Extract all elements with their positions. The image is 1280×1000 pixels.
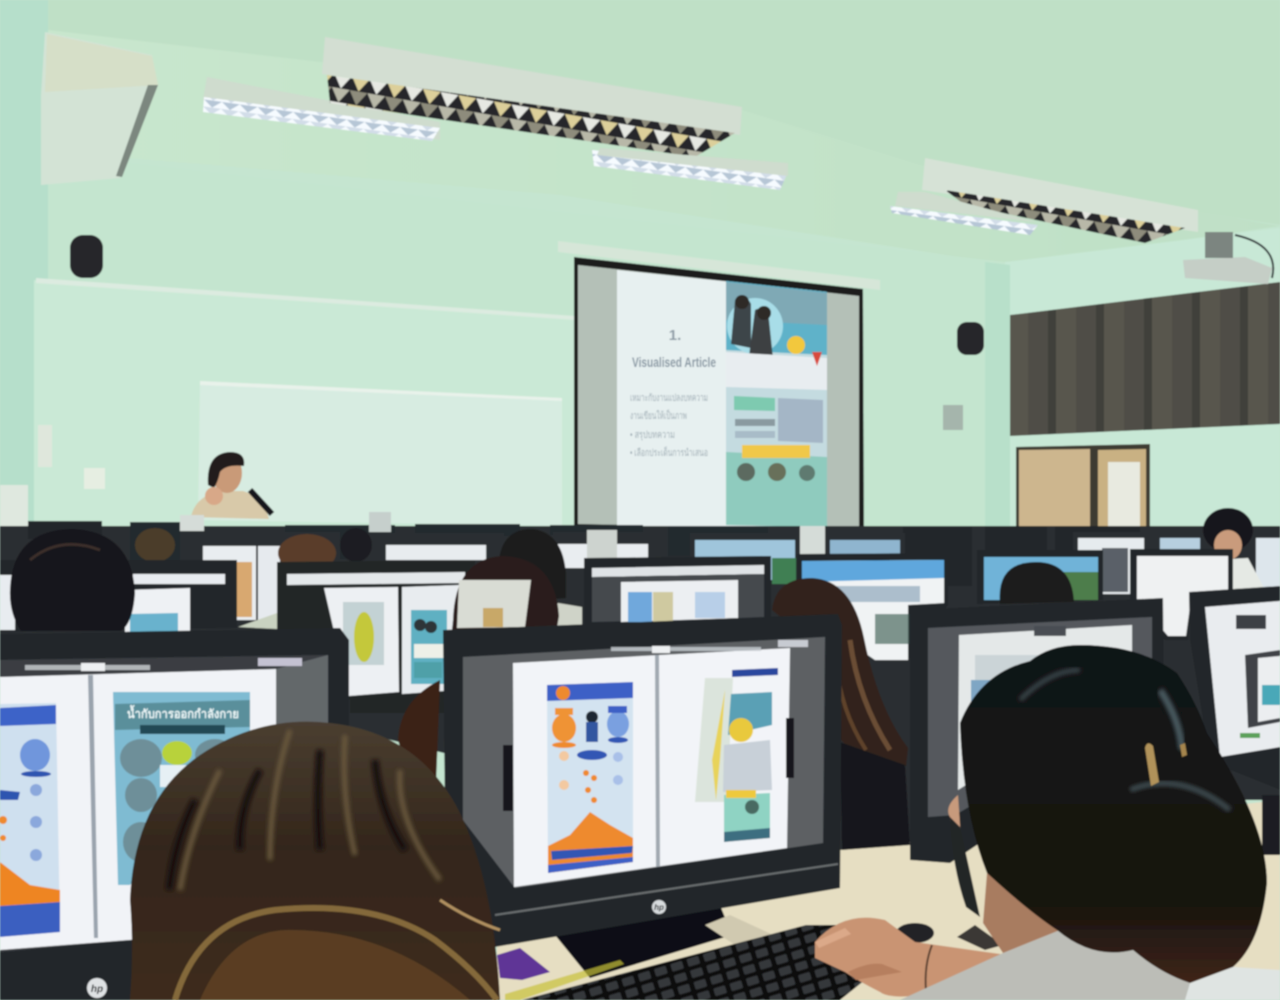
- front monitor centre: [443, 614, 842, 978]
- ceiling light fixture left: [203, 77, 440, 141]
- right student hair: [948, 645, 1267, 983]
- toolbar: [611, 640, 808, 653]
- front monitor far right: [1189, 586, 1280, 790]
- desk surface: [497, 795, 1280, 1000]
- overlapping infographic: [712, 668, 778, 842]
- slide bullet text: • สรุปบทความ: [630, 430, 675, 441]
- HP logo: hp: [91, 984, 103, 995]
- saving infographic: [547, 682, 633, 873]
- dark furniture band behind monitors: [0, 526, 1280, 865]
- electrical box and thermostat: [0, 405, 963, 555]
- front left student hair: [130, 722, 500, 1000]
- small infographic left: [0, 703, 60, 937]
- water infographic: [113, 692, 250, 885]
- second row monitor centre: [584, 556, 771, 624]
- speaker right: [957, 322, 984, 355]
- monitor white screen right: [1130, 549, 1233, 640]
- slide bullet text: [630, 393, 708, 459]
- toolbar: [25, 658, 302, 671]
- curtains: [1010, 282, 1280, 436]
- second row monitor far left: [0, 560, 237, 632]
- water infographic: น้ำกับการออกกำลังกาย: [127, 704, 239, 721]
- second row monitor centre left: [277, 560, 475, 713]
- HP logo: hp: [654, 903, 664, 912]
- slide bullet text: • เลือกประเด็นการนำเสนอ: [630, 445, 708, 459]
- student far right background: [1203, 508, 1264, 590]
- projection screen: [558, 241, 880, 530]
- slide: [617, 270, 827, 528]
- second row monitor right: [797, 553, 948, 660]
- projector: [1183, 232, 1273, 284]
- back row students: [135, 528, 582, 629]
- right student neck: [983, 873, 1060, 953]
- presenter: [191, 452, 272, 519]
- right student arm and hand: [815, 918, 1004, 997]
- right student sweater: [900, 930, 1280, 1000]
- mouse and phone: [896, 923, 1003, 950]
- slide bullet text: เหมาะกับงานแปลงบทความ: [630, 393, 708, 404]
- HP logo: [87, 978, 107, 998]
- front monitor left: [0, 628, 349, 1000]
- student with paper sheet: [398, 556, 559, 786]
- wall panel and whiteboard: [34, 278, 575, 526]
- slide bullet text: งานเขียนให้เป็นภาพ: [630, 408, 687, 422]
- back row of monitors: [28, 512, 1280, 622]
- speaker left: [70, 235, 103, 278]
- front monitor right: [910, 598, 1164, 863]
- monitor stand: [555, 905, 780, 978]
- keyboard: [505, 925, 880, 1000]
- ceiling light fixture centre: [322, 37, 788, 190]
- air conditioner: [41, 32, 158, 185]
- purple bag: [497, 948, 550, 980]
- HP logo: [652, 900, 666, 914]
- door: [1016, 444, 1150, 530]
- ceiling light fixture right: [890, 158, 1198, 243]
- slide title: [632, 327, 716, 370]
- monitor with landscape and student: [977, 550, 1103, 604]
- left column: [0, 0, 48, 530]
- slide title: Visualised Article: [632, 354, 716, 370]
- student head left: [10, 529, 135, 631]
- student long hair: [772, 578, 910, 850]
- slide infographic: [726, 281, 827, 527]
- slide title: 1.: [669, 327, 681, 344]
